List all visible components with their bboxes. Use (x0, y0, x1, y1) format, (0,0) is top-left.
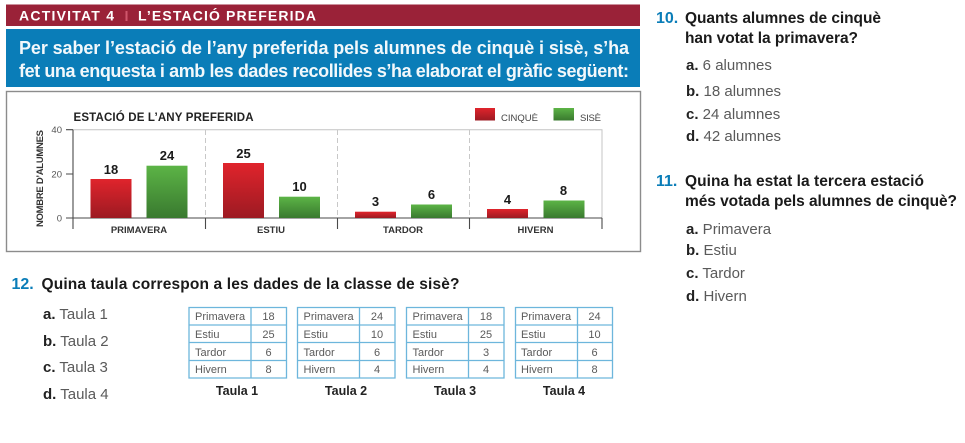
header bar: ACTIVITAT 4 (19, 8, 114, 24)
question 11: d. Hivern (686, 288, 747, 305)
y axis ticks: 20 (51, 170, 62, 180)
question 12: b. Taula 2 (43, 333, 109, 350)
table 1: Primavera (195, 311, 246, 323)
table 2: 4 (374, 364, 380, 376)
bars: tardor: 6 (428, 187, 435, 202)
table 4: 10 (588, 329, 601, 341)
intro text box (6, 29, 640, 87)
table 3: 18 (480, 311, 492, 323)
intro text box: fet una enquesta i amb les dades recollides s’ha elaborat el gràfic següent: (19, 61, 629, 81)
header bar: L’ESTACIÓ PREFERIDA (138, 6, 316, 24)
table 1: Estiu (195, 329, 219, 341)
question 10: Quants alumnes de cinquè (685, 10, 881, 27)
table 4: Estiu (521, 329, 545, 341)
y axis label: NOMBRE D’ALUMNES (35, 130, 46, 227)
question 11: 11. (656, 173, 677, 190)
table 3: Taula 3 (434, 384, 476, 398)
question 12: c. Taula 3 (43, 359, 108, 376)
question 12: d. Taula 4 (43, 386, 109, 403)
table 3: Tardor (412, 347, 444, 359)
question 11 (656, 173, 957, 305)
table 4: Taula 4 (543, 384, 585, 398)
panel: bar chart (6, 92, 640, 252)
question 10: 10. (656, 10, 678, 27)
bars: tardor: TARDOR (383, 225, 423, 236)
legend: SISÈ (580, 113, 601, 124)
table 4: 8 (591, 364, 598, 376)
table 2: Estiu (304, 329, 328, 341)
question 10: d. 42 alumnes (686, 128, 781, 145)
table 1: 6 (265, 347, 272, 359)
question 11: b. Estiu (686, 242, 737, 259)
question 12: Quina taula correspon a les dades de la classe de sisè? (42, 276, 460, 293)
question 12: a. Taula 1 (43, 306, 108, 323)
table 4: 24 (588, 311, 601, 323)
table 1: 25 (262, 329, 275, 341)
question 10: a. 6 alumnes (686, 57, 772, 74)
bars: estiu: 25 (236, 146, 251, 161)
table 4: Hivern (521, 364, 553, 376)
bars: hivern: HIVERN (518, 225, 554, 236)
question 10: han votat la primavera? (685, 30, 858, 47)
table 3: Hivern (412, 364, 444, 376)
table 2: 6 (374, 347, 380, 359)
bars: primavera (90, 148, 188, 236)
bars: tardor (355, 187, 452, 236)
bars: hivern: 4 (504, 192, 512, 207)
table 2: Taula 2 (325, 384, 367, 398)
table 3: Primavera (412, 311, 464, 323)
bars: hivern (487, 183, 584, 236)
y axis ticks: 40 (51, 125, 62, 136)
y axis ticks: 0 (57, 214, 62, 224)
bars: estiu (223, 146, 320, 236)
question 11: Quina ha estat la tercera estació (685, 173, 924, 190)
bars: tardor: 3 (372, 194, 379, 209)
table 2: 24 (371, 311, 383, 323)
legend (475, 108, 601, 124)
question 12: 12. (12, 276, 34, 293)
question 11: c. Tardor (686, 265, 745, 282)
table 1: Hivern (195, 364, 227, 376)
bars: estiu: ESTIU (257, 225, 285, 236)
table 4: Tardor (521, 347, 553, 359)
plot frame (66, 130, 602, 229)
table 1: 18 (262, 311, 275, 323)
bars: primavera: PRIMAVERA (111, 225, 167, 236)
table 3: 3 (483, 347, 489, 359)
table 3: 25 (480, 329, 492, 341)
question 12 (12, 276, 460, 403)
y axis ticks (51, 125, 62, 224)
table 1: Taula 1 (216, 384, 258, 398)
table 2 (298, 308, 395, 398)
table 2: Primavera (304, 311, 355, 323)
table 4 (516, 308, 612, 398)
legend: CINQUÈ (501, 113, 538, 124)
question 11: a. Primavera (686, 221, 772, 238)
bars: primavera: 24 (160, 148, 175, 163)
question 10: b. 18 alumnes (686, 83, 781, 100)
table 3: 4 (483, 364, 489, 376)
table 2: Tardor (304, 347, 335, 359)
chart title: ESTACIÓ DE L’ANY PREFERIDA (74, 111, 254, 124)
table 2: 10 (371, 329, 383, 341)
question 11: més votada pels alumnes de cinquè? (685, 193, 957, 210)
table 3: Estiu (412, 329, 437, 341)
table 2: Hivern (304, 364, 335, 376)
table 3 (406, 308, 504, 398)
question 10: c. 24 alumnes (686, 106, 780, 123)
bars: estiu: 10 (292, 179, 307, 194)
bars: primavera: 18 (104, 162, 118, 177)
table 4: Primavera (521, 311, 572, 323)
table 1: 8 (265, 364, 272, 376)
bars: hivern: 8 (560, 183, 567, 198)
table 4: 6 (591, 347, 598, 359)
table 1: Tardor (195, 347, 227, 359)
intro text box: Per saber l’estació de l’any preferida pels alumnes de cinquè i sisè, s’ha (19, 38, 630, 58)
table 1 (189, 308, 286, 398)
question 10 (656, 10, 881, 145)
header bar (6, 4, 640, 26)
